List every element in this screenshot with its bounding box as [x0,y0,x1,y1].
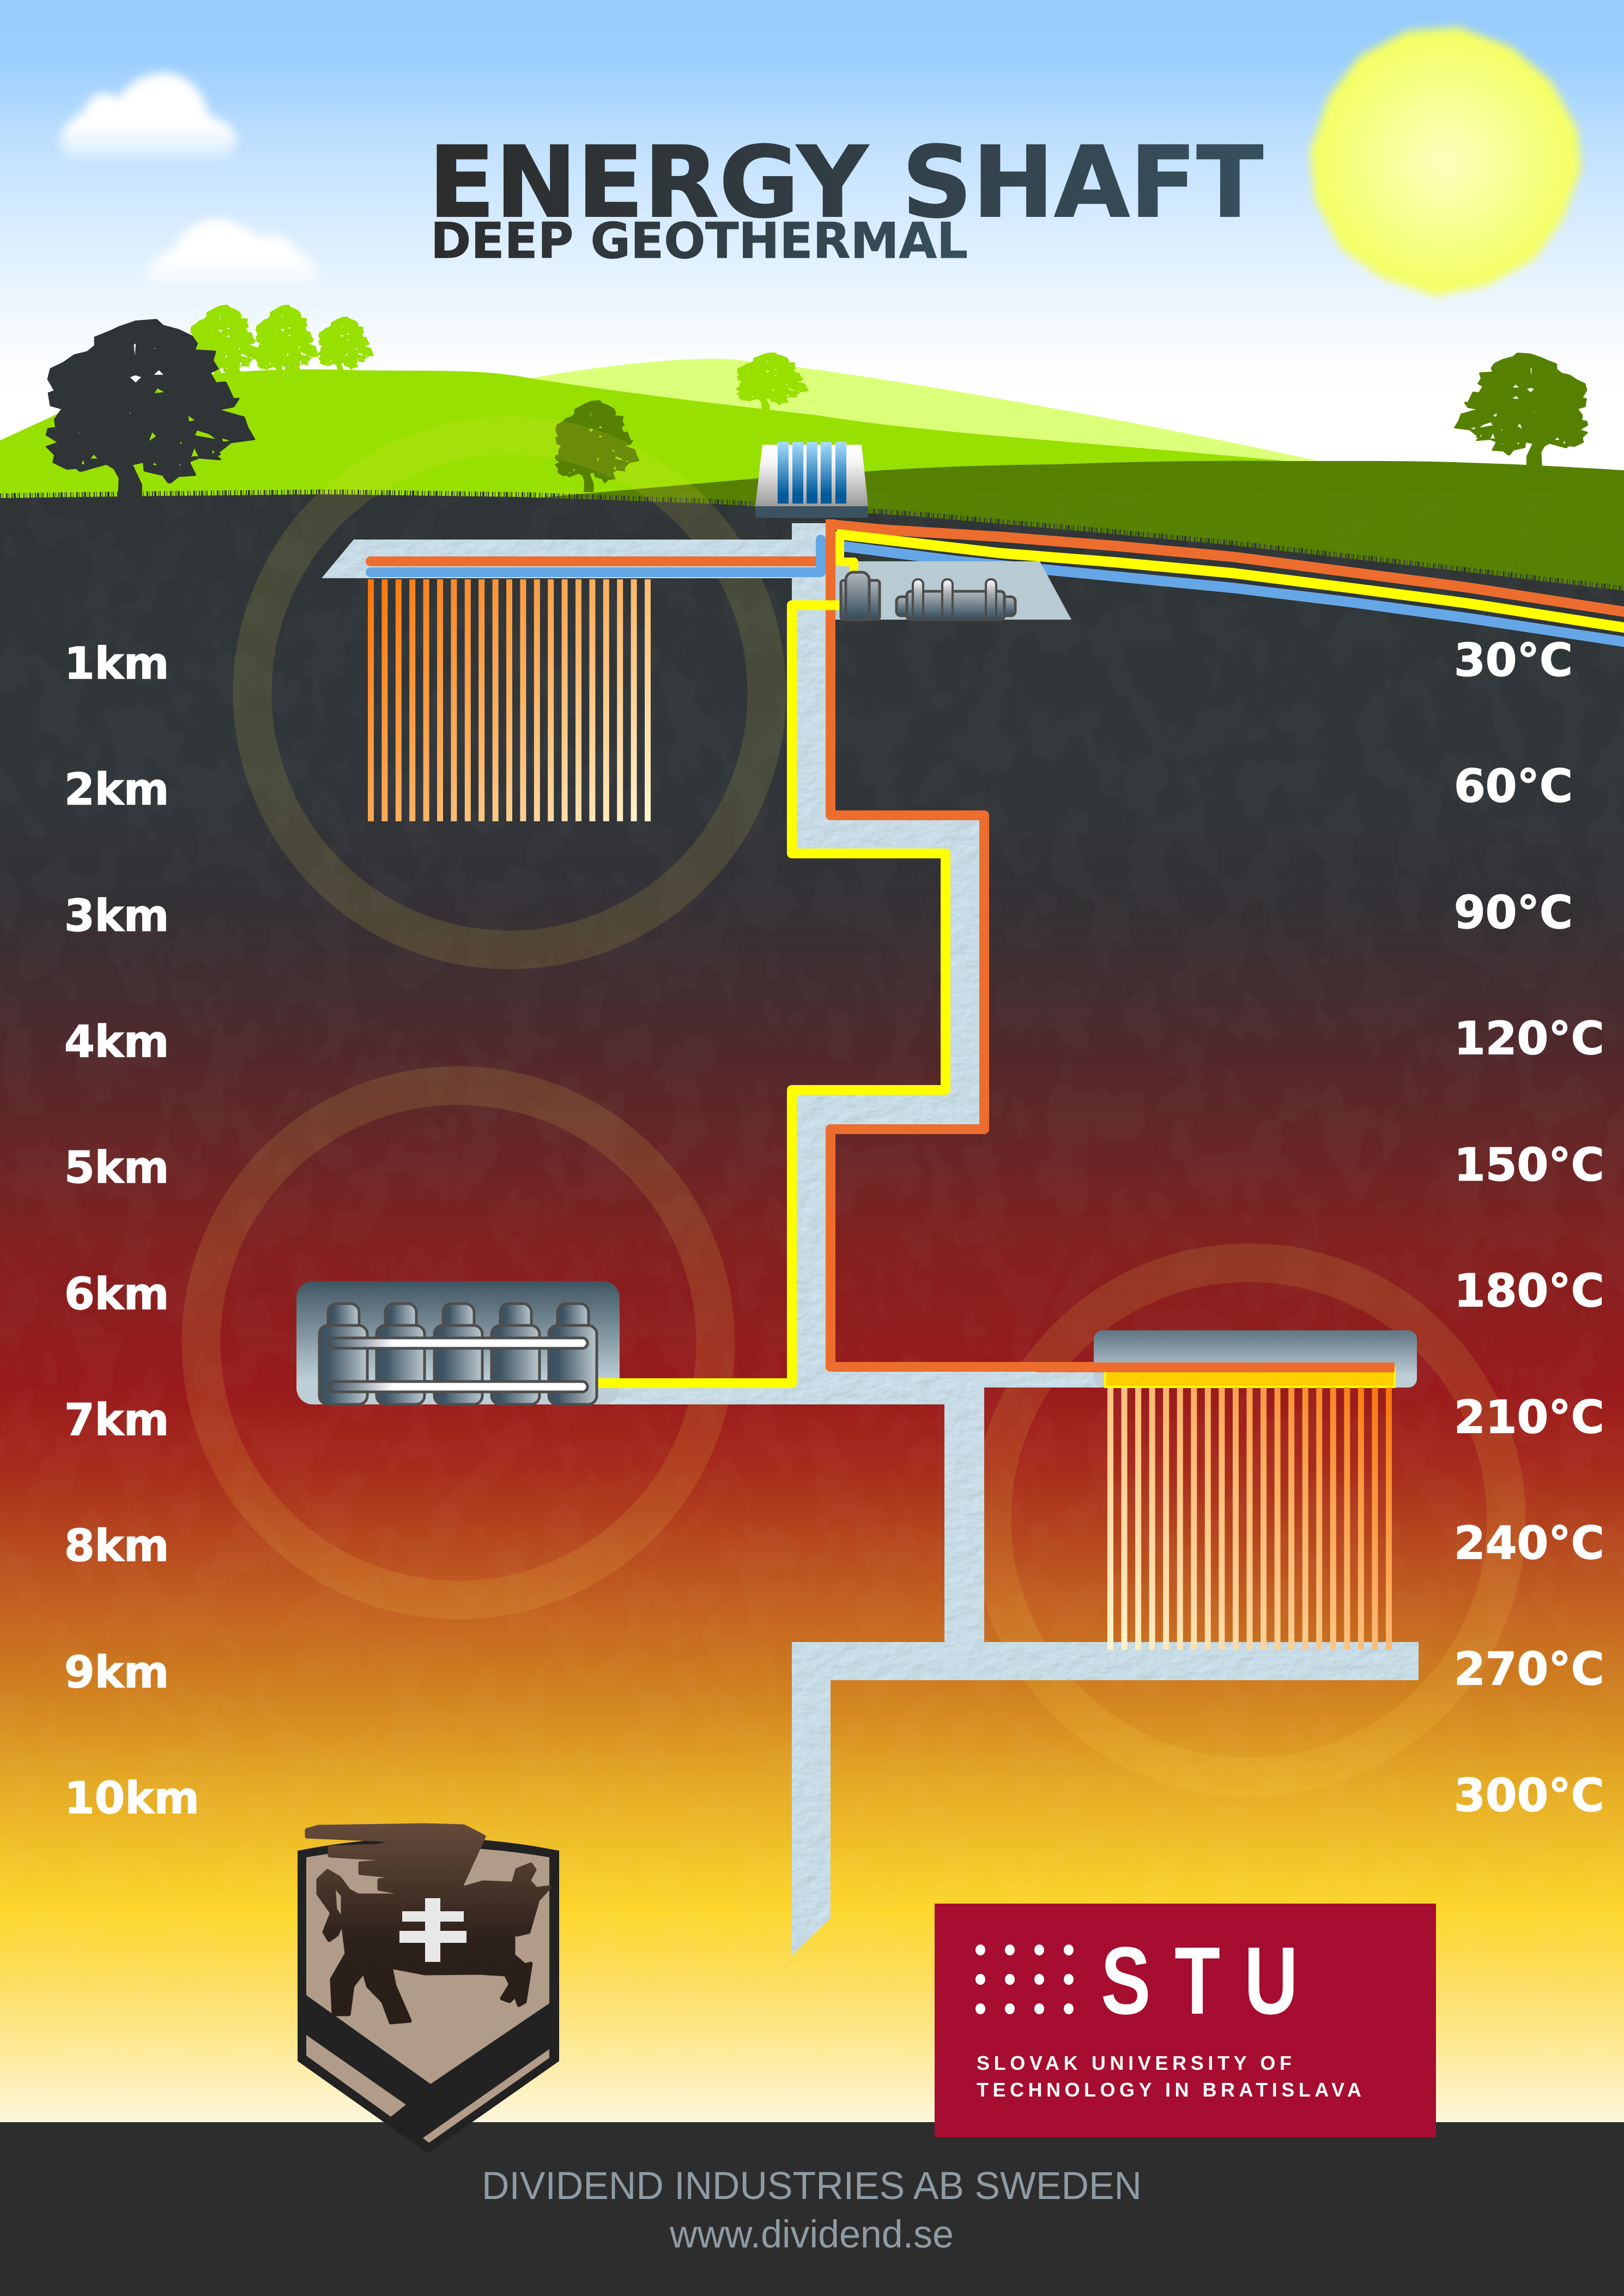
tree cluster behind main hill [191,305,373,384]
machine room floor [835,561,1071,620]
university name: TECHNOLOGY IN BRATISLAVA [977,2079,1361,2101]
temperature labels: 120°C [1454,1012,1604,1065]
ring: upper heat zone [252,435,767,950]
pipe: orange shaft route [831,519,1395,1367]
depth labels [64,638,199,1824]
winged bull [307,1825,549,2022]
pipe slope: blue [820,543,1624,643]
depth labels: 2km [64,764,169,815]
university name [977,2052,1361,2101]
temperature labels: 60°C [1454,760,1573,813]
tree right [1456,353,1587,466]
depth labels: 6km [64,1269,169,1319]
depth labels: 8km [64,1520,169,1571]
temperature labels: 300°C [1454,1769,1604,1822]
shield logo [298,1825,559,2153]
double cross [399,1898,466,1962]
depth labels: 9km [64,1647,169,1698]
pipe: yellow shaft route [594,605,946,1383]
cloud upper left [61,73,237,158]
machine: pump [841,572,880,620]
depth labels: 5km [64,1142,169,1193]
heat exchanger room [1035,1330,1417,1388]
heading: energy shaft: ENERGY SHAFT [428,126,1263,240]
depth labels: 3km [64,890,169,941]
cloud lower left [148,219,317,286]
title [428,126,1263,270]
machine: turbine [896,579,1015,620]
sky background [0,0,1624,599]
ring: lower heat zone [992,1263,1506,1777]
tree left large [48,320,253,500]
sun [1310,27,1581,296]
dot grid [975,1944,1074,2014]
temperature labels: 270°C [1454,1643,1604,1695]
upper tunnel pipes [371,540,821,572]
foreground hill: dark green [522,461,1624,599]
tree on light hill [737,353,808,410]
temperature labels: 180°C [1454,1264,1604,1317]
tree on middle hill [556,401,639,492]
shaft concrete [322,523,1419,1955]
ring: middle heat zone [201,1086,716,1600]
depth labels: 7km [64,1395,169,1445]
temperature labels: 90°C [1454,886,1573,939]
middle hill: bright green [0,369,1297,518]
storage room with cylinders [296,1281,627,1404]
temperature labels: 210°C [1454,1391,1604,1444]
STU logo block [935,1904,1436,2137]
pipe slope: yellow [837,534,1624,628]
depth labels: 1km [64,638,169,689]
footer company name: DIVIDEND INDUSTRIES AB SWEDEN [482,2165,1142,2208]
depth labels: 10km [64,1773,199,1824]
footer website: www.dividend.se [669,2213,954,2256]
temperature labels: 240°C [1454,1517,1604,1570]
footer band [0,2122,1624,2296]
ground [0,498,1624,2125]
temperature labels [1454,634,1604,1822]
subheading: deep geothermal: DEEP GEOTHERMAL [431,213,968,270]
university name: SLOVAK UNIVERSITY OF [977,2052,1292,2074]
STU wordmark: STU [1101,1928,1322,2034]
power plant building [755,442,868,518]
temperature labels: 150°C [1454,1138,1604,1191]
temperature labels: 30°C [1454,634,1573,687]
background hill: light green [527,359,1316,507]
pipe slope: orange [827,524,1624,613]
pipe: yellow riser to machines [840,531,854,573]
heat exchanger strips: lower [1107,1388,1392,1650]
depth labels: 4km [64,1016,169,1067]
heat exchanger strips: upper [368,579,651,821]
